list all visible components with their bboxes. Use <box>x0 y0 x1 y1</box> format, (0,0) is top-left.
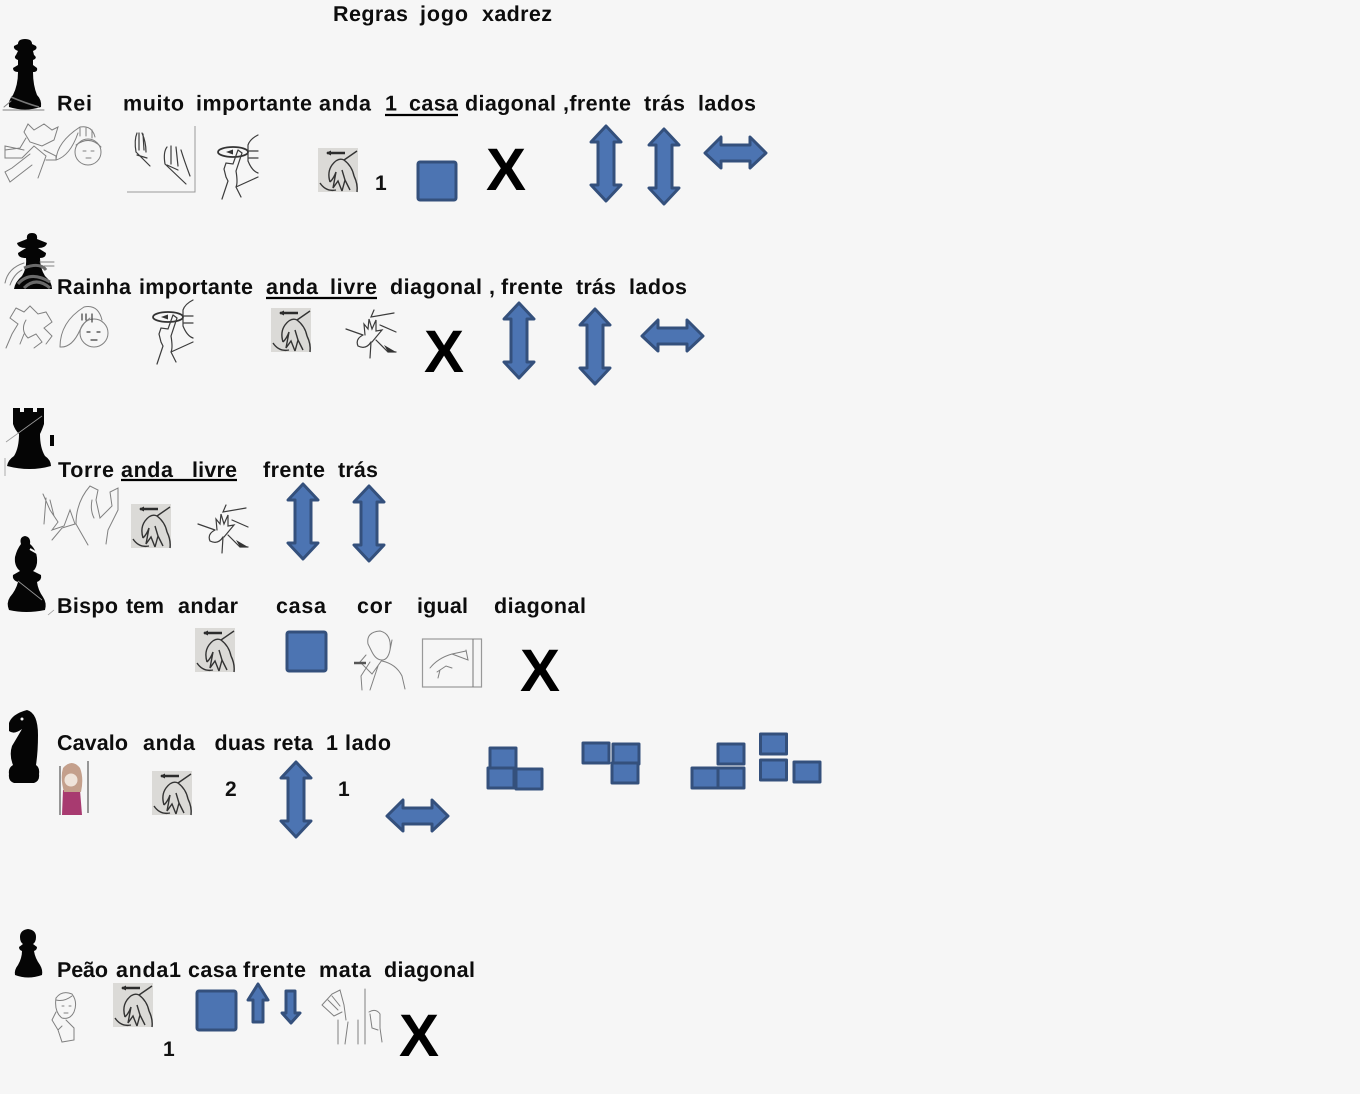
arrow: frente tras <box>288 484 318 559</box>
diagram: knight move 4 <box>760 734 820 782</box>
icon: pawn chess piece <box>15 929 42 978</box>
icon: sign anda <box>152 771 192 815</box>
heading: bispo text: Bispo <box>57 594 118 618</box>
arrow: frente tras <box>591 126 621 201</box>
icon: X diagonal: X <box>399 1002 439 1069</box>
heading: cavalo text: lado <box>345 731 391 755</box>
icon: X diagonal: X <box>424 318 464 385</box>
heading: rei text: importante <box>196 92 312 116</box>
number 1: 1 <box>338 778 350 801</box>
icon: sign importante <box>218 135 258 199</box>
heading: cavalo text: anda <box>143 731 196 755</box>
arrow: frente tras <box>504 303 534 378</box>
heading: bispo text: diagonal <box>494 594 586 618</box>
icon: sign anda <box>271 308 311 352</box>
heading: bispo text: tem <box>126 594 164 618</box>
icon: sign torre <box>43 486 118 545</box>
heading: rainha text: frente <box>501 275 563 299</box>
icon: sign mata <box>322 989 382 1044</box>
panel: bispo <box>8 536 586 704</box>
heading: peao text: frente <box>243 958 306 982</box>
arrow: frente tras 2 <box>649 129 679 204</box>
heading: peao text: diagonal <box>384 958 475 982</box>
heading: cavalo text <box>57 731 391 755</box>
heading: peao text <box>57 958 475 982</box>
heading: cavalo text: reta <box>273 731 314 755</box>
icon: sign livre <box>346 310 396 358</box>
heading: torre text <box>58 458 378 482</box>
heading: rei text: lados <box>698 92 756 116</box>
heading: cavalo text: duas <box>214 731 266 755</box>
arrow: lados <box>705 137 766 168</box>
arrow: reta <box>281 762 311 837</box>
icon: sign cor <box>354 631 405 690</box>
icon: sign rei <box>5 124 101 182</box>
heading: torre text: livre <box>192 458 237 482</box>
arrow: tras down <box>282 991 300 1023</box>
arrow: frente tras 2 <box>580 309 610 384</box>
heading: rei text: ,frente <box>563 92 631 116</box>
number 1: 1 <box>375 172 387 195</box>
icon: rook chess piece <box>5 408 54 476</box>
title <box>333 2 552 26</box>
heading: bispo text <box>57 594 586 618</box>
heading: rainha text: diagonal <box>390 275 482 299</box>
arrow: lados <box>642 320 703 351</box>
heading: peao text: casa <box>188 958 238 982</box>
number 2: 2 <box>225 778 237 801</box>
heading: bispo text: casa <box>276 594 327 618</box>
heading: rei text <box>57 92 756 116</box>
icon: sign peao girl <box>52 993 76 1042</box>
heading: rainha text: importante <box>139 275 253 299</box>
icon: bishop chess piece <box>8 536 54 615</box>
arrow: frente tras 2 <box>354 486 384 561</box>
panel: torre <box>5 408 384 561</box>
heading: rainha text: Rainha <box>57 275 132 299</box>
diagram: knight move 1 <box>488 748 542 789</box>
title: jogo <box>419 2 468 26</box>
heading: rainha text <box>57 275 687 299</box>
heading: torre text: Torre <box>58 458 114 482</box>
heading: rainha text: trás <box>576 275 616 299</box>
icon: king chess piece <box>3 39 44 110</box>
icon: sign igual <box>422 639 482 687</box>
icon: blue square casa <box>197 991 236 1030</box>
icon: sign importante <box>153 300 193 364</box>
icon: blue square casa <box>418 162 456 200</box>
heading: bispo text: igual <box>417 594 468 618</box>
heading: peao text: mata <box>319 958 372 982</box>
title: xadrez <box>482 2 552 26</box>
icon: sign anda <box>113 983 153 1027</box>
diagram: knight move 3 <box>692 744 744 788</box>
icon: sign cavalo girl <box>60 761 88 815</box>
title: Regras <box>333 2 408 26</box>
icon: sign muito <box>127 126 195 192</box>
arrow: frente up <box>248 984 268 1022</box>
heading: rei text: 1 <box>385 92 397 116</box>
heading: peao text: Peão <box>57 958 108 982</box>
panel: rei <box>3 39 766 204</box>
number 1: 1 <box>163 1038 175 1061</box>
heading: rainha text: lados <box>629 275 687 299</box>
icon: sign anda <box>131 504 171 548</box>
heading: rainha text: , <box>489 275 495 299</box>
icon: sign rainha <box>6 306 108 348</box>
heading: cavalo text: Cavalo <box>57 731 128 755</box>
heading: rei text: anda <box>319 92 372 116</box>
heading: rainha text: livre <box>330 275 377 299</box>
heading: rei text: diagonal <box>465 92 556 116</box>
icon: X diagonal: X <box>520 637 560 704</box>
icon: knight chess piece <box>9 710 39 783</box>
icon: sign anda <box>318 148 358 192</box>
panel: peao <box>15 929 475 1069</box>
diagram: knight move 2 <box>583 743 639 783</box>
icon: sign livre <box>198 505 248 553</box>
heading: peao text: anda1 <box>116 958 181 982</box>
heading: torre text: frente <box>263 458 325 482</box>
icon: blue square casa <box>287 632 326 671</box>
heading: cavalo text: 1 <box>326 731 338 755</box>
icon: sign anda <box>195 628 235 672</box>
heading: rei text: Rei <box>57 92 92 116</box>
heading: rainha text: anda <box>266 275 319 299</box>
heading: bispo text: cor <box>357 594 393 618</box>
panel: rainha <box>5 233 703 385</box>
heading: torre text: anda <box>121 458 174 482</box>
icon: queen chess piece <box>5 233 54 289</box>
heading: torre text: trás <box>338 458 378 482</box>
heading: rei text: muito <box>123 92 184 116</box>
icon: X diagonal: X <box>486 136 526 203</box>
panel: cavalo <box>9 710 820 837</box>
heading: rei text: trás <box>644 92 685 116</box>
heading: rei text: casa <box>409 92 459 116</box>
heading: bispo text: andar <box>178 594 239 618</box>
arrow: lado <box>387 800 448 831</box>
